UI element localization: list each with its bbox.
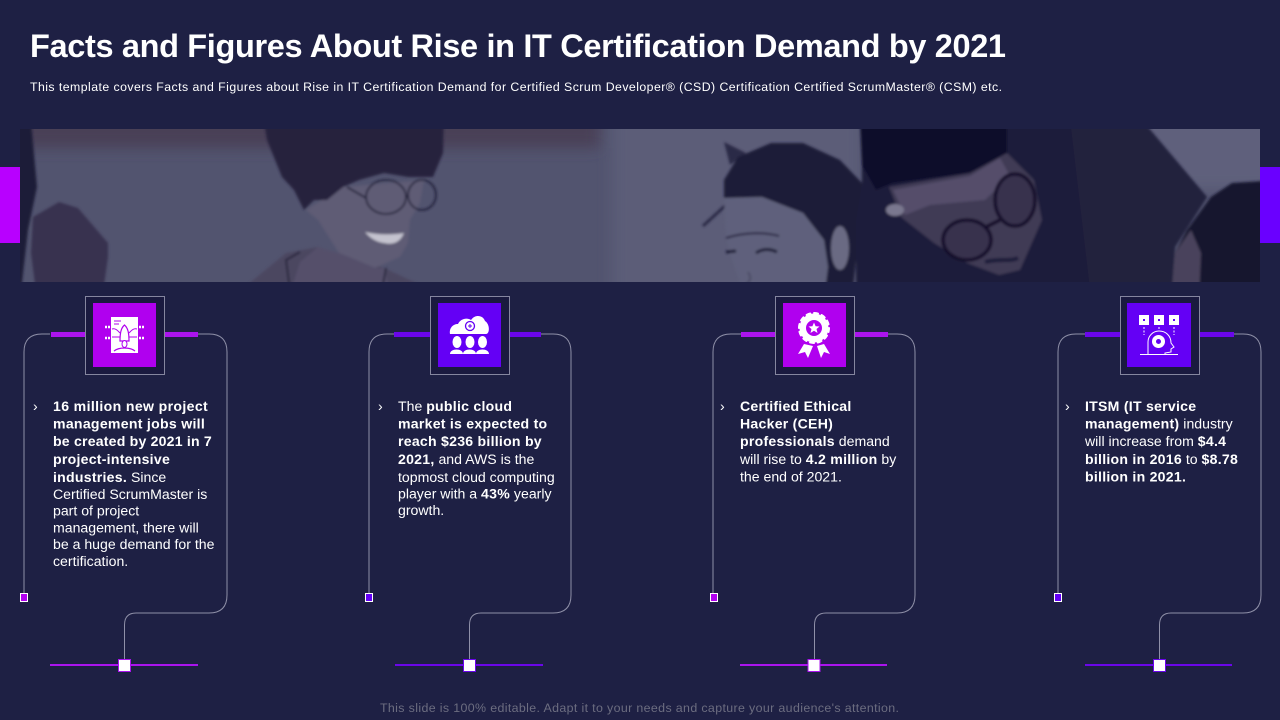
right figure — [1176, 180, 1260, 282]
bullet text: management jobs will — [53, 416, 205, 432]
bullet text: › — [33, 398, 38, 414]
bearded man — [854, 129, 1208, 282]
end marker — [1054, 594, 1062, 602]
bullet text: will increase from $4.4 — [1084, 433, 1226, 449]
bullet text: reach $236 billion by — [398, 433, 542, 449]
title: Facts and Figures About Rise in IT Certification Demand by 2021 — [30, 28, 1006, 64]
bullet text — [1065, 398, 1238, 484]
left accent bar — [0, 167, 20, 243]
bullet text: › — [1065, 398, 1070, 414]
left figure — [0, 110, 37, 300]
bullet text: be created by 2021 in 7 — [53, 433, 212, 449]
bullet text: player with a 43% yearly — [398, 486, 552, 502]
bullet text: the end of 2021. — [740, 468, 842, 484]
panel: public cloud market — [366, 296, 571, 672]
icon: cloud and people — [430, 296, 510, 374]
shoulder — [251, 248, 413, 282]
bullet text: part of project — [53, 502, 139, 518]
bullet text: 2021, and AWS is the — [398, 451, 534, 467]
bullet text: ITSM (IT service — [1085, 398, 1196, 414]
bullet text: 16 million new project — [53, 398, 208, 414]
connector bars — [394, 332, 541, 337]
second woman — [724, 142, 746, 165]
bullet text: Certified ScrumMaster is — [53, 486, 207, 502]
bullet text: management) industry — [1085, 416, 1234, 432]
end marker — [710, 594, 718, 602]
bullet text: market is expected to — [398, 416, 548, 432]
right accent bar — [1260, 167, 1280, 243]
panel outline — [369, 334, 571, 660]
bottom slider — [740, 660, 887, 672]
bullet text: management, there will — [53, 520, 199, 536]
bullet text: billion in 2016 to $8.78 — [1085, 451, 1238, 467]
bottom slider — [1085, 660, 1232, 672]
panel: certified ethical hacker — [710, 296, 915, 672]
connector bars — [51, 332, 198, 337]
panel outline — [24, 334, 227, 660]
bullet text: project-intensive — [53, 451, 170, 467]
footer note: This slide is 100% editable. Adapt it to your needs and capture your audience's attention. — [380, 701, 899, 715]
bullet text: › — [378, 398, 383, 414]
bullet text: topmost cloud computing — [398, 469, 555, 485]
bullet text: industries. Since — [53, 469, 166, 485]
banner photo — [20, 129, 1260, 282]
bullet text — [378, 398, 555, 518]
icon: head with gear — [1120, 296, 1200, 374]
bullet text: professionals demand — [740, 433, 890, 449]
bullet text: growth. — [398, 502, 444, 518]
end marker — [20, 594, 28, 602]
panel: project management jobs — [20, 296, 227, 672]
connector bars — [1085, 332, 1234, 337]
icon: rocket document — [86, 296, 164, 374]
bullet text: be a huge demand for the — [53, 536, 215, 552]
end marker — [366, 594, 372, 602]
panel: ITSM industry — [1054, 296, 1261, 672]
panel outline — [713, 334, 915, 660]
bullet text: will rise to 4.2 million by — [739, 451, 897, 467]
bullet text: certification. — [53, 553, 128, 569]
subtitle: This template covers Facts and Figures about Rise in IT Certification Demand for Certified Scrum Developer® (CSD) Certification Certified ScrumMaster® (CSM) etc. — [30, 80, 1002, 94]
bullet text: The public cloud — [398, 398, 512, 414]
bullet text: billion in 2021. — [1085, 468, 1186, 484]
icon: award ribbon — [776, 296, 854, 374]
bullet text: Certified Ethical — [740, 398, 852, 414]
bullet text: Hacker (CEH) — [740, 416, 833, 432]
connector bars — [741, 332, 888, 337]
bullet text — [720, 398, 897, 484]
curly-haired woman — [306, 180, 424, 268]
bottom slider — [395, 660, 543, 672]
panel outline — [1058, 334, 1261, 660]
bullet text: › — [720, 398, 725, 414]
bottom slider — [50, 660, 198, 672]
bullet text — [33, 398, 215, 569]
